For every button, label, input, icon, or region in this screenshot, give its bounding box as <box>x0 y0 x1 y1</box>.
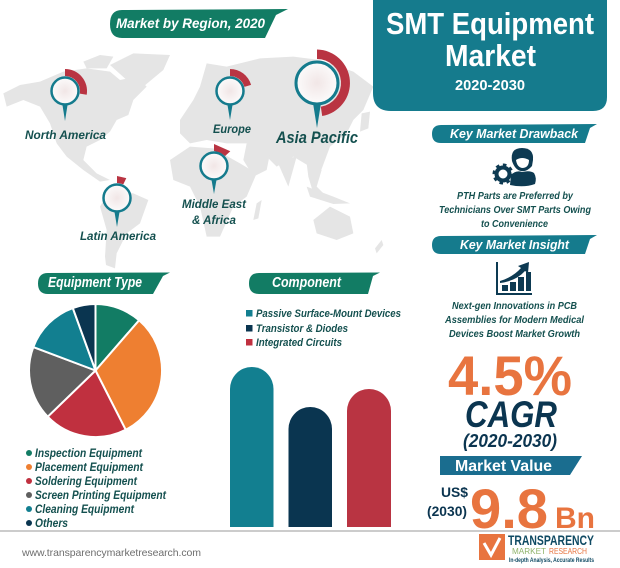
bar chart: component <box>230 367 391 527</box>
stat: CAGR <box>448 344 572 451</box>
title panel <box>373 0 607 111</box>
stat: CAGR: CAGR <box>465 394 557 435</box>
stat: CAGR: 4.5% <box>448 344 572 407</box>
pin: North America <box>25 69 106 142</box>
title panel: SMT Equipment <box>386 6 594 41</box>
world map <box>3 53 383 268</box>
pin: Asia Pacific <box>275 50 358 147</box>
icon: technician with gear <box>494 148 536 186</box>
text: insight description: Next-gen Innovations in PCB <box>452 300 577 312</box>
legend: component: Passive Surface-Mount Devices <box>256 308 401 320</box>
banner: key market insight <box>432 235 597 254</box>
logo: RESEARCH <box>549 547 587 556</box>
pin: Latin America: Latin America <box>80 229 156 243</box>
text: insight description <box>444 300 585 340</box>
heading: equipment type: Equipment Type <box>48 275 142 291</box>
stat: market value: Bn <box>555 502 595 535</box>
banner: market value <box>440 456 582 475</box>
heading: equipment type <box>38 272 170 294</box>
icon: growth chart <box>497 262 532 294</box>
pin: Middle East and Africa <box>182 144 247 227</box>
banner: key market insight: Key Market Insight <box>460 238 570 252</box>
pin: Europe: Europe <box>213 122 251 136</box>
legend: equipment type: Screen Printing Equipment <box>35 490 167 502</box>
legend: equipment type: Placement Equipment <box>35 462 144 474</box>
logo: In-depth Analysis, Accurate Results <box>509 558 595 564</box>
stat: CAGR: (2020-2030) <box>463 431 557 451</box>
legend: equipment type: Inspection Equipment <box>35 448 143 460</box>
text: insight description: Assemblies for Modern Medical <box>444 314 585 326</box>
pie chart <box>29 304 162 437</box>
pin: Middle East and Africa: Middle East <box>182 197 247 211</box>
pin: Asia Pacific: Asia Pacific <box>275 129 358 147</box>
legend: equipment type: Soldering Equipment <box>35 476 138 488</box>
legend: equipment type: Cleaning Equipment <box>35 504 135 516</box>
legend: component: Integrated Circuits <box>256 337 342 349</box>
pin: Middle East and Africa: & Africa <box>192 213 236 227</box>
footer url: www.transparencymarketresearch.com <box>21 547 201 559</box>
heading: component <box>249 272 380 294</box>
banner: key market drawback: Key Market Drawback <box>450 127 579 141</box>
logo <box>479 532 595 564</box>
stat: market value: (2030) <box>427 503 467 519</box>
heading: market by region <box>110 9 288 38</box>
pin: Latin America <box>80 176 156 243</box>
heading: component: Component <box>272 275 342 291</box>
legend: equipment type <box>26 448 167 530</box>
heading: market by region: Market by Region, 2020 <box>116 15 265 31</box>
text: drawback description <box>439 190 591 230</box>
text: drawback description: Technicians Over SMT Parts Owing <box>439 204 591 216</box>
pin: North America: North America <box>25 128 106 142</box>
title panel: 2020-2030 <box>455 77 525 94</box>
legend: equipment type: Others <box>35 518 68 530</box>
legend: component: Transistor & Diodes <box>256 323 348 335</box>
legend: component <box>246 308 401 349</box>
logo: MARKET <box>512 547 546 556</box>
text: drawback description: to Convenience <box>481 218 548 230</box>
stat: market value <box>427 477 595 540</box>
pin: Europe <box>213 69 251 136</box>
banner: key market drawback <box>432 124 597 143</box>
banner: market value: Market Value <box>455 458 552 475</box>
text: drawback description: PTH Parts are Preferred by <box>457 190 574 202</box>
stat: market value: 9.8 <box>470 477 548 540</box>
stat: market value: US$ <box>441 484 468 500</box>
title panel: Market <box>445 38 536 73</box>
text: insight description: Devices Boost Market Growth <box>449 328 580 340</box>
